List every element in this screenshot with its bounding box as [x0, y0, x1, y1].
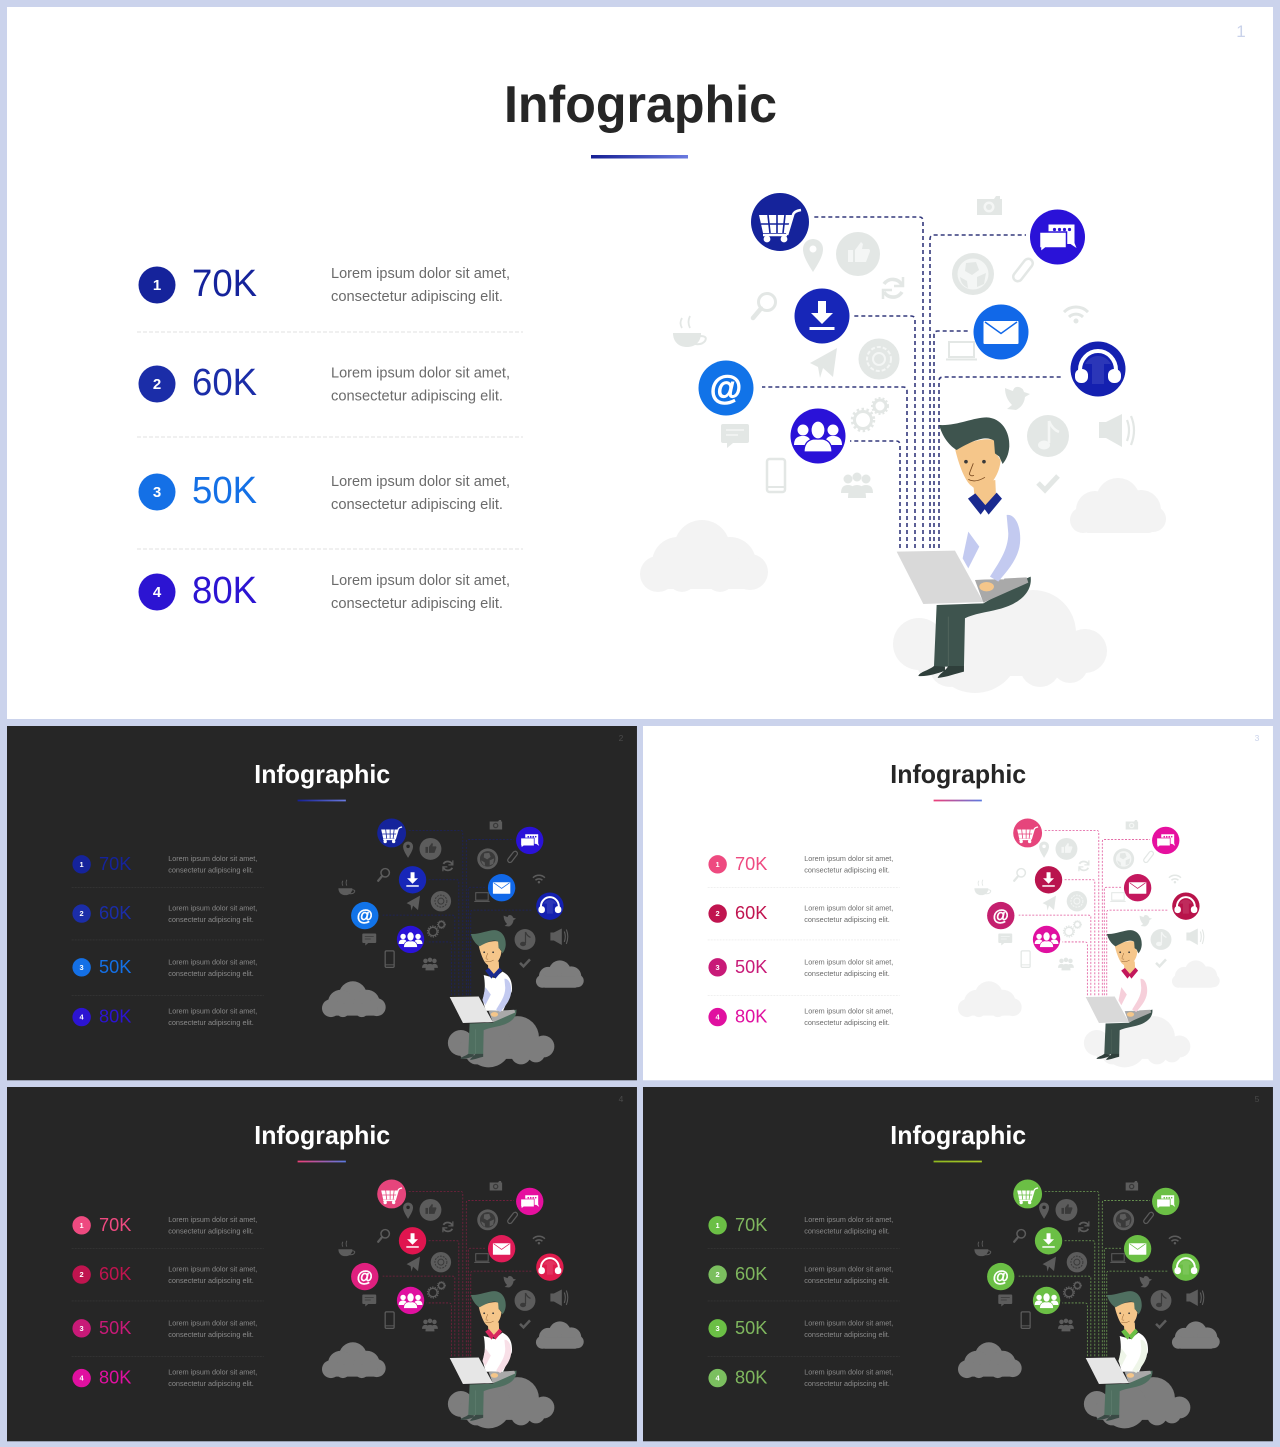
dashed connectors: [383, 1191, 531, 1356]
stat row 1: Lorem ipsum dolor sit amet,: [804, 854, 893, 863]
icon: mail: [974, 304, 1028, 360]
icon: bird: [1005, 387, 1030, 410]
stat row 1: Lorem ipsum dolor sit amet,: [168, 1215, 257, 1224]
stat row 1: consectetur adipiscing elit.: [804, 1226, 890, 1235]
stat row 2: 2: [80, 909, 84, 918]
illustration: [958, 819, 1220, 1067]
icon: mail: [488, 1235, 515, 1262]
icon: download: [399, 866, 426, 893]
description 3: Lorem ipsum dolor sit amet,: [331, 474, 510, 490]
stat row 4: Lorem ipsum dolor sit amet,: [168, 1007, 257, 1016]
title: Infographic: [254, 761, 390, 789]
panel: slide 2 dark blue theme: [7, 726, 637, 1080]
title underline: [934, 800, 982, 801]
stat row 3: 3: [80, 1324, 84, 1333]
icon: cart: [1013, 1180, 1042, 1208]
cloud under person: [1084, 1377, 1190, 1428]
stat row 1: consectetur adipiscing elit.: [168, 1226, 254, 1235]
icon: at sign: [987, 1263, 1014, 1290]
stat row 2: 60K: [99, 1264, 132, 1285]
icon: chat: [516, 1188, 543, 1215]
stat row 2: [72, 903, 257, 924]
stat row 4: 80K: [735, 1007, 768, 1028]
value 80K: 80K: [192, 570, 257, 612]
person with laptop: [450, 1291, 516, 1421]
stat row 3: consectetur adipiscing elit.: [804, 1330, 890, 1339]
grey background icons: [338, 820, 568, 970]
icon: chat: [1030, 210, 1085, 264]
cloud left: [958, 1342, 1022, 1378]
stat row 1: 70K: [99, 1215, 132, 1236]
panel: slide 4 dark pink theme: [7, 1087, 637, 1441]
stat row 2: [72, 1264, 257, 1285]
stat row 2: Lorem ipsum dolor sit amet,: [804, 1264, 893, 1273]
stat row 3: [72, 1318, 257, 1339]
illustration: [322, 1180, 584, 1428]
stat row 2: Lorem ipsum dolor sit amet,: [804, 903, 893, 912]
description 4: Lorem ipsum dolor sit amet,: [331, 573, 510, 589]
stat row 1: 1: [80, 1221, 84, 1230]
icon: at sign: @: [993, 907, 1009, 925]
icon: at sign: [351, 902, 378, 929]
icon: at sign: @: [993, 1268, 1009, 1286]
icon: phone: [767, 459, 785, 492]
icon: download: [1035, 866, 1062, 893]
cloud under person: [448, 1377, 554, 1428]
stat row 4: 4: [716, 1013, 721, 1022]
icon: people: [397, 1287, 424, 1314]
stat row 2: Lorem ipsum dolor sit amet,: [168, 1264, 257, 1273]
stat row 3: 3: [716, 1324, 720, 1333]
icon: at sign: @: [357, 1268, 373, 1286]
stat row 4: Lorem ipsum dolor sit amet,: [168, 1368, 257, 1377]
person with laptop: [450, 930, 516, 1060]
cloud under person: [1084, 1016, 1190, 1067]
icon: people: [397, 926, 424, 953]
title underline: [934, 1161, 982, 1162]
icon: chat: [1152, 1188, 1179, 1215]
icon: cart: [377, 819, 406, 847]
badge 4: 4: [153, 584, 162, 601]
grey background icons: [974, 1181, 1204, 1331]
stat row 2: 2: [716, 1270, 720, 1279]
description 2: consectetur adipiscing elit.: [331, 388, 503, 404]
icon: download: [399, 1227, 426, 1254]
stat row 1: [138, 263, 510, 305]
panel: slide 1 white blue theme: [7, 7, 1273, 719]
icon: chat: [1152, 827, 1179, 854]
stat row 3: [72, 957, 257, 978]
stat row 1: consectetur adipiscing elit.: [804, 865, 890, 874]
icon: people: [790, 408, 846, 464]
icon: at sign: [351, 1263, 378, 1290]
description 1: consectetur adipiscing elit.: [331, 289, 503, 305]
icon: people: [1033, 1287, 1060, 1314]
slide 5 background: [643, 1087, 1273, 1441]
stat row 4: [72, 1007, 257, 1028]
illustration: [640, 193, 1166, 693]
stat row 3: consectetur adipiscing elit.: [804, 969, 890, 978]
stat row 1: 70K: [735, 1215, 768, 1236]
icon: paper plane: [810, 348, 837, 378]
cloud right: [536, 1321, 584, 1349]
illustration: [958, 1180, 1220, 1428]
stat row 1: Lorem ipsum dolor sit amet,: [168, 854, 257, 863]
stat row 1: [72, 854, 257, 875]
icon: thumbs up: [836, 232, 880, 276]
icon: cart: [377, 1180, 406, 1208]
stat row 3: 50K: [735, 957, 768, 978]
title underline: [298, 1161, 346, 1162]
stat row 2: Lorem ipsum dolor sit amet,: [168, 903, 257, 912]
cloud left: [322, 981, 386, 1017]
stat row 4: 80K: [99, 1007, 132, 1028]
stat row 2: 60K: [735, 903, 768, 924]
icon: camera: [977, 196, 1002, 215]
stat row 2: [708, 903, 893, 924]
stat row 4: 4: [716, 1374, 721, 1383]
icon: speech bubble: [721, 424, 749, 448]
stat row 1: Lorem ipsum dolor sit amet,: [804, 1215, 893, 1224]
icon: cart: [1013, 819, 1042, 847]
person with laptop: [1086, 930, 1152, 1060]
icon: refresh: [883, 277, 903, 299]
icon: two gears: [852, 398, 888, 431]
title underline: [591, 155, 688, 158]
stat row 3: Lorem ipsum dolor sit amet,: [168, 957, 257, 966]
icon: mail: [1124, 874, 1151, 901]
badge 1: 1: [153, 277, 161, 294]
page number: 4: [619, 1094, 624, 1104]
badge 2: 2: [153, 376, 161, 393]
icon: group: [841, 472, 873, 498]
stat row 2: consectetur adipiscing elit.: [804, 1276, 890, 1285]
stat row 4: Lorem ipsum dolor sit amet,: [804, 1007, 893, 1016]
stat row 1: 70K: [99, 854, 132, 875]
stat row 4: 80K: [99, 1368, 132, 1389]
badge 4: [138, 574, 176, 610]
stat row 1: 1: [716, 860, 720, 869]
description 4: consectetur adipiscing elit.: [331, 596, 503, 612]
title: Infographic: [254, 1122, 390, 1150]
stat row 3: consectetur adipiscing elit.: [168, 969, 254, 978]
stat row 4: consectetur adipiscing elit.: [804, 1018, 890, 1027]
icon: wifi: [1064, 307, 1088, 324]
person with laptop: [1086, 1291, 1152, 1421]
badge 3: [138, 474, 176, 510]
dashed connectors: [762, 217, 1061, 548]
icon: globe: [952, 253, 994, 295]
icon: headphones: [1070, 342, 1126, 396]
cloud left: [958, 981, 1022, 1017]
icon: headphones: [536, 1253, 564, 1281]
icon: at sign: @: [357, 907, 373, 925]
grey background icons: [974, 820, 1204, 970]
icon: download: [794, 288, 850, 344]
icon: mail: [1124, 1235, 1151, 1262]
title underline: [298, 800, 346, 801]
slide 4 background: [7, 1087, 637, 1441]
stat row 3: [708, 1318, 893, 1339]
stat row 1: [72, 1215, 257, 1236]
dashed connectors: [1019, 1191, 1167, 1356]
icon: pin: [803, 239, 823, 272]
stat row 3: Lorem ipsum dolor sit amet,: [804, 1318, 893, 1327]
icon: cart: [751, 193, 809, 251]
stat row 3: 3: [80, 963, 84, 972]
stat row 4: 4: [80, 1013, 85, 1022]
stat row 2: [708, 1264, 893, 1285]
page number: 5: [1255, 1094, 1260, 1104]
page number: 2: [619, 733, 624, 743]
icon: mail: [488, 874, 515, 901]
stat row 1: consectetur adipiscing elit.: [168, 865, 254, 874]
icon: check: [1038, 476, 1058, 490]
stat row 4: consectetur adipiscing elit.: [168, 1018, 254, 1027]
stat row 4: consectetur adipiscing elit.: [168, 1379, 254, 1388]
title: Infographic: [890, 1122, 1026, 1150]
stat row 2: 2: [716, 909, 720, 918]
stat row 2: consectetur adipiscing elit.: [168, 915, 254, 924]
stat row 3: 3: [716, 963, 720, 972]
cloud right: [1172, 1321, 1220, 1349]
icon: paper clip: [1011, 257, 1035, 283]
icon: gear: [858, 338, 900, 380]
stat row 4: [708, 1007, 893, 1028]
stat row 3: 50K: [735, 1318, 768, 1339]
icon: chat: [516, 827, 543, 854]
stat row 4: consectetur adipiscing elit.: [804, 1379, 890, 1388]
icon: at sign: [698, 360, 754, 416]
icon: magnifier: [753, 294, 776, 318]
description 2: Lorem ipsum dolor sit amet,: [331, 366, 510, 382]
stat row 4: 80K: [735, 1368, 768, 1389]
stat row 4: [138, 570, 510, 612]
stat row 1: [708, 854, 893, 875]
page number: 1: [1236, 22, 1246, 41]
stat row 3: [708, 957, 893, 978]
cloud under person: [893, 590, 1107, 693]
badge 3: 3: [153, 484, 161, 501]
stat row 3: 50K: [99, 957, 132, 978]
dashed connectors: [1019, 830, 1167, 995]
stat row 4: [72, 1368, 257, 1389]
stat row 4: 4: [80, 1374, 85, 1383]
icon: laptop: [946, 342, 977, 360]
stat row 2: consectetur adipiscing elit.: [804, 915, 890, 924]
grey background icons: [338, 1181, 568, 1331]
person with laptop: [897, 417, 1031, 678]
dashed connectors: [383, 830, 531, 995]
illustration: [322, 819, 584, 1067]
stat row 3: consectetur adipiscing elit.: [168, 1330, 254, 1339]
page number: 3: [1255, 733, 1260, 743]
title: Infographic: [504, 76, 777, 134]
cloud under person: [448, 1016, 554, 1067]
panel: slide 5 dark green theme: [643, 1087, 1273, 1441]
icon: download: [1035, 1227, 1062, 1254]
badge 2: [138, 366, 176, 402]
description 1: Lorem ipsum dolor sit amet,: [331, 266, 510, 282]
stat row 1: 1: [716, 1221, 720, 1230]
slide 1 background: [7, 7, 1273, 719]
stat row 3: 50K: [99, 1318, 132, 1339]
cloud right: [536, 960, 584, 988]
icon: headphones: [1172, 1253, 1200, 1281]
cloud left: [640, 520, 768, 592]
cloud right: [1070, 478, 1166, 533]
stat row 2: 2: [80, 1270, 84, 1279]
title: Infographic: [890, 761, 1026, 789]
cloud right: [1172, 960, 1220, 988]
slide 2 background: [7, 726, 637, 1080]
stat row 2: [138, 362, 510, 404]
slide 3 background: [643, 726, 1273, 1080]
stat row 3: Lorem ipsum dolor sit amet,: [804, 957, 893, 966]
stat row 2: 60K: [99, 903, 132, 924]
stat row 1: [708, 1215, 893, 1236]
badge 1: [138, 266, 176, 304]
stat row 3: Lorem ipsum dolor sit amet,: [168, 1318, 257, 1327]
stat row 4: [708, 1368, 893, 1389]
icon: at sign: @: [710, 369, 742, 406]
stat row 4: Lorem ipsum dolor sit amet,: [804, 1368, 893, 1377]
value 50K: 50K: [192, 470, 257, 512]
panel: slide 3 white pink theme: [643, 726, 1273, 1080]
stat row 2: 60K: [735, 1264, 768, 1285]
stat row 3: [138, 470, 510, 513]
stat row 2: consectetur adipiscing elit.: [168, 1276, 254, 1285]
stat row 1: 70K: [735, 854, 768, 875]
cloud left: [322, 1342, 386, 1378]
icon: headphones: [536, 892, 564, 920]
stat row 1: 1: [80, 860, 84, 869]
value 60K: 60K: [192, 362, 257, 404]
icon: music: [1027, 415, 1069, 457]
icon: speaker: [1099, 414, 1134, 447]
icon: headphones: [1172, 892, 1200, 920]
icon: coffee cup: [673, 316, 706, 347]
icon: at sign: [987, 902, 1014, 929]
icon: people: [1033, 926, 1060, 953]
value 70K: 70K: [192, 263, 257, 305]
description 3: consectetur adipiscing elit.: [331, 497, 503, 513]
